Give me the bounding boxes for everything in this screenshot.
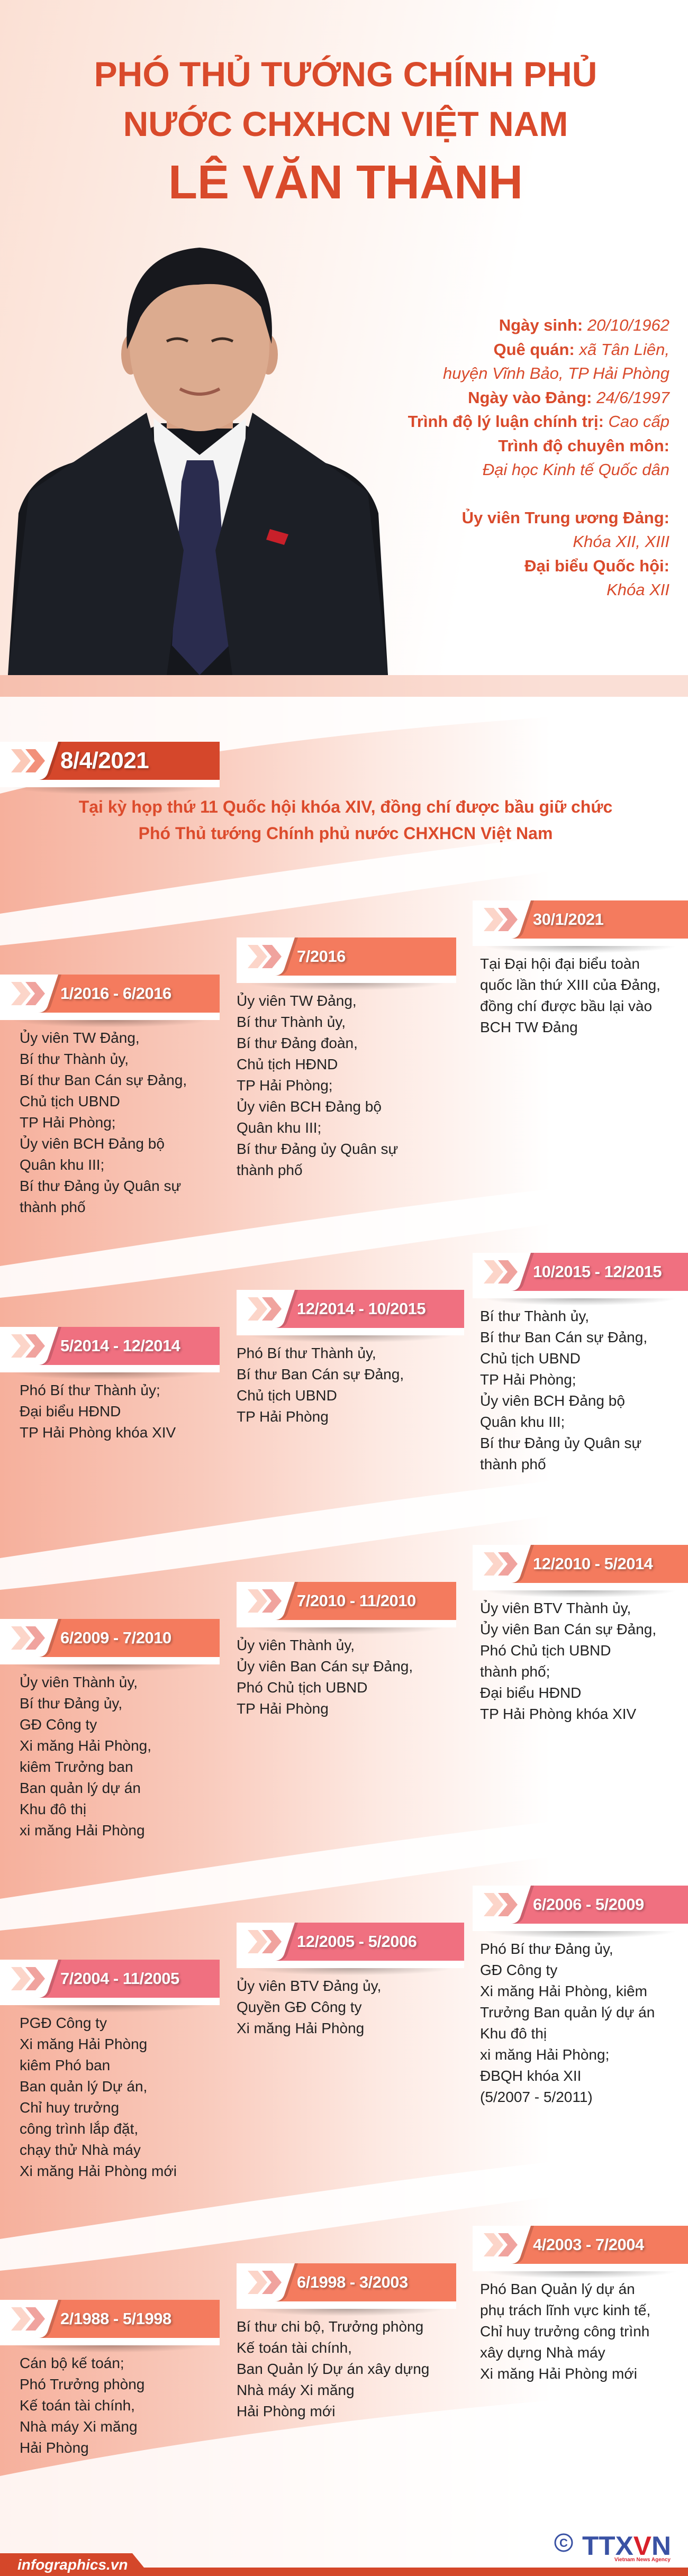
banner: 7/2016 bbox=[237, 937, 456, 989]
portrait illustration bbox=[8, 248, 388, 675]
text: 30/1/2021: Tại Đại hội đại biểu toàn bbox=[480, 955, 640, 972]
banner: 8/4/2021: 8/4/2021 bbox=[60, 748, 149, 773]
banner: 12/2010 - 5/2014: 12/2010 - 5/2014 bbox=[533, 1554, 653, 1573]
text: 6/2009 - 7/2010: GĐ Công ty bbox=[20, 1716, 97, 1733]
banner: 7/2004 - 11/2005: 7/2004 - 11/2005 bbox=[60, 1969, 179, 1988]
text: 10/2015 - 12/2015: Ủy viên BCH Đảng bộ bbox=[480, 1392, 625, 1409]
info block: Trình độ lý luận chính trị: Cao cấp bbox=[408, 412, 669, 431]
banner: 5/2014 - 12/2014 bbox=[0, 1327, 220, 1379]
banner: 2/1988 - 5/1998 bbox=[0, 2300, 220, 2353]
text: 12/2010 - 5/2014 bbox=[480, 1600, 656, 1722]
text: 1/2016 - 6/2016: Ủy viên BCH Đảng bộ bbox=[20, 1135, 165, 1152]
banner: 6/2006 - 5/2009: 6/2006 - 5/2009 bbox=[533, 1895, 644, 1914]
text: 7/2004 - 11/2005: kiêm Phó ban bbox=[20, 2057, 110, 2073]
text: 10/2015 - 12/2015: Quân khu III; bbox=[480, 1414, 565, 1430]
headline text: Tại kỳ họp thứ 11 Quốc hội khóa XIV, đồng chí được bầu giữ chức bbox=[79, 797, 612, 816]
info block: Khóa XII, XIII bbox=[573, 532, 669, 551]
text: 5/2014 - 12/2014: TP Hải Phòng khóa XIV bbox=[20, 1424, 176, 1441]
text: 10/2015 - 12/2015: TP Hải Phòng; bbox=[480, 1371, 576, 1388]
text: 1/2016 - 6/2016: TP Hải Phòng; bbox=[20, 1114, 116, 1131]
text: 12/2005 - 5/2006 bbox=[237, 1978, 381, 2036]
info block: Đại biểu Quốc hội: bbox=[524, 557, 669, 575]
text: 12/2010 - 5/2014: Ủy viên BTV Thành ủy, bbox=[480, 1600, 631, 1616]
text: 4/2003 - 7/2004: phụ trách lĩnh vực kinh tế, bbox=[480, 2302, 650, 2318]
text: 12/2010 - 5/2014: Đại biểu HĐND bbox=[480, 1685, 581, 1701]
banner: 2/1988 - 5/1998: 2/1988 - 5/1998 bbox=[60, 2309, 171, 2328]
text: 6/2009 - 7/2010: xi măng Hải Phòng bbox=[20, 1822, 145, 1838]
text: 10/2015 - 12/2015: Chủ tịch UBND bbox=[480, 1350, 581, 1367]
text: 1/2016 - 6/2016: Bí thư Thành ủy, bbox=[20, 1051, 129, 1067]
logo: TTXVN: TTXVN bbox=[582, 2532, 671, 2561]
info block: Quê quán: xã Tân Liên, bbox=[493, 340, 669, 359]
text: 2/1988 - 5/1998: Cán bộ kế toán; bbox=[20, 2355, 124, 2371]
banner: 7/2004 - 11/2005 bbox=[0, 1960, 220, 2011]
text: 7/2004 - 11/2005: PGĐ Công ty bbox=[20, 2015, 107, 2031]
banner: 8/4/2021 bbox=[0, 742, 220, 794]
headline text bbox=[79, 797, 612, 843]
info block: Khóa XII bbox=[606, 580, 669, 599]
text: 6/2006 - 5/2009: xi măng Hải Phòng; bbox=[480, 2046, 609, 2063]
timeline background bbox=[0, 675, 688, 2576]
banner: 30/1/2021 bbox=[473, 900, 688, 952]
text: 1/2016 - 6/2016: Ủy viên TW Đảng, bbox=[20, 1030, 140, 1046]
text: 7/2004 - 11/2005: công trình lắp đặt, bbox=[20, 2120, 138, 2137]
text: 12/2014 - 10/2015: Chủ tịch UBND bbox=[237, 1387, 337, 1404]
text: 12/2010 - 5/2014: Ủy viên Ban Cán sự Đảng, bbox=[480, 1621, 656, 1637]
banner: 6/1998 - 3/2003 bbox=[237, 2263, 456, 2315]
banner: 1/2016 - 6/2016: 1/2016 - 6/2016 bbox=[60, 984, 171, 1003]
text: 7/2004 - 11/2005: Xi măng Hải Phòng bbox=[20, 2036, 147, 2052]
banner: 12/2005 - 5/2006 bbox=[237, 1923, 464, 1974]
text: 2/1988 - 5/1998: Kế toán tài chính, bbox=[20, 2397, 135, 2414]
logo: TTXVN: C bbox=[559, 2536, 568, 2550]
text: 5/2014 - 12/2014: Phó Bí thư Thành ủy; bbox=[20, 1382, 160, 1398]
text: 1/2016 - 6/2016: Chủ tịch UBND bbox=[20, 1093, 120, 1109]
title: LÊ VĂN THÀNH bbox=[168, 156, 523, 209]
text: 7/2016: thành phố bbox=[237, 1162, 303, 1178]
text: 6/2009 - 7/2010: kiêm Trưởng ban bbox=[20, 1759, 133, 1775]
info block: Ngày sinh: 20/10/1962 bbox=[499, 316, 669, 334]
text: 6/2006 - 5/2009: Phó Bí thư Đảng ủy, bbox=[480, 1941, 613, 1957]
text: 6/2006 - 5/2009: ĐBQH khóa XII bbox=[480, 2068, 581, 2084]
text: 7/2016: Bí thư Đảng đoàn, bbox=[237, 1035, 358, 1051]
text: 30/1/2021 bbox=[480, 955, 660, 1035]
text: 7/2010 - 11/2010 bbox=[237, 1637, 413, 1717]
text: 6/1998 - 3/2003 bbox=[237, 2316, 429, 2422]
banner: 4/2003 - 7/2004 bbox=[473, 2226, 688, 2278]
text: 1/2016 - 6/2016: Bí thư Ban Cán sự Đảng, bbox=[20, 1072, 187, 1088]
text: 7/2010 - 11/2010: TP Hải Phòng bbox=[237, 1700, 329, 1717]
text: 10/2015 - 12/2015 bbox=[480, 1308, 647, 1472]
text: 10/2015 - 12/2015: Bí thư Đảng ủy Quân sự bbox=[480, 1435, 641, 1451]
text: 12/2010 - 5/2014: thành phố; bbox=[480, 1663, 550, 1680]
logo: TTXVN bbox=[553, 2532, 675, 2563]
header background bbox=[0, 0, 688, 675]
text: 2/1988 - 5/1998 bbox=[20, 2353, 144, 2459]
banner: 6/2006 - 5/2009 bbox=[473, 1886, 688, 1937]
text: 7/2016: Ủy viên TW Đảng, bbox=[237, 993, 357, 1009]
title: NƯỚC CHXHCN VIỆT NAM bbox=[123, 104, 568, 143]
text: 1/2016 - 6/2016: Bí thư Đảng ủy Quân sự bbox=[20, 1178, 181, 1194]
text: 7/2016: Ủy viên BCH Đảng bộ bbox=[237, 1098, 382, 1115]
text: 6/2006 - 5/2009: Xi măng Hải Phòng, kiêm bbox=[480, 1983, 647, 1999]
banner: 12/2014 - 10/2015: 12/2014 - 10/2015 bbox=[297, 1299, 426, 1318]
banner: 6/1998 - 3/2003: 6/1998 - 3/2003 bbox=[297, 2273, 408, 2291]
text: 12/2010 - 5/2014: Phó Chủ tịch UBND bbox=[480, 1642, 611, 1659]
banner: 7/2016: 7/2016 bbox=[297, 947, 346, 966]
banner: 10/2015 - 12/2015 bbox=[473, 1253, 688, 1305]
banner: 12/2005 - 5/2006: 12/2005 - 5/2006 bbox=[297, 1932, 417, 1951]
text: 6/2006 - 5/2009: Khu đô thị bbox=[480, 2025, 547, 2042]
footer text: infographics.vn bbox=[17, 2556, 128, 2573]
text: 6/2009 - 7/2010: Ban quản lý dự án bbox=[20, 1780, 141, 1796]
text: 4/2003 - 7/2004: Chỉ huy trưởng công trình bbox=[480, 2323, 649, 2340]
text: 2/1988 - 5/1998: Phó Trưởng phòng bbox=[20, 2376, 144, 2392]
banner: 30/1/2021: 30/1/2021 bbox=[533, 910, 603, 929]
text: 6/2009 - 7/2010: Bí thư Đảng ủy, bbox=[20, 1695, 122, 1712]
info block: huyện Vĩnh Bảo, TP Hải Phòng bbox=[443, 364, 669, 383]
text: 6/2006 - 5/2009: (5/2007 - 5/2011) bbox=[480, 2089, 593, 2105]
text: 2/1988 - 5/1998: Hải Phòng bbox=[20, 2440, 89, 2456]
text: 7/2004 - 11/2005 bbox=[20, 2015, 177, 2179]
text: 4/2003 - 7/2004: xây dựng Nhà máy bbox=[480, 2344, 605, 2361]
info block: Ủy viên Trung ương Đảng: bbox=[462, 508, 669, 527]
text: 30/1/2021: BCH TW Đảng bbox=[480, 1019, 578, 1035]
text: 7/2016: Quân khu III; bbox=[237, 1119, 321, 1136]
title bbox=[94, 54, 597, 209]
text: 12/2014 - 10/2015 bbox=[237, 1345, 404, 1425]
text: 7/2010 - 11/2010: Ủy viên Thành ủy, bbox=[237, 1637, 355, 1653]
text: 7/2016: Bí thư Thành ủy, bbox=[237, 1014, 346, 1030]
logo: TTXVN: Vietnam News Agency bbox=[614, 2557, 671, 2563]
info block: Ngày vào Đảng: 24/6/1997 bbox=[468, 388, 669, 406]
text: 5/2014 - 12/2014 bbox=[20, 1382, 176, 1441]
text: 2/1988 - 5/1998: Nhà máy Xi măng bbox=[20, 2418, 138, 2435]
text: 6/2009 - 7/2010: Khu đô thị bbox=[20, 1801, 86, 1817]
text: 4/2003 - 7/2004 bbox=[480, 2281, 650, 2382]
text: 7/2016 bbox=[237, 993, 398, 1178]
banner: 4/2003 - 7/2004: 4/2003 - 7/2004 bbox=[533, 2235, 644, 2254]
text: 7/2016: TP Hải Phòng; bbox=[237, 1077, 333, 1094]
text: 10/2015 - 12/2015: Bí thư Thành ủy, bbox=[480, 1308, 589, 1324]
banner: 7/2010 - 11/2010: 7/2010 - 11/2010 bbox=[297, 1591, 416, 1610]
text: 7/2004 - 11/2005: Chỉ huy trưởng bbox=[20, 2099, 119, 2116]
text: 12/2005 - 5/2006: Xi măng Hải Phòng bbox=[237, 2020, 364, 2036]
text: 6/2009 - 7/2010: Xi măng Hải Phòng, bbox=[20, 1737, 151, 1754]
text: 6/1998 - 3/2003: Ban Quản lý Dự án xây dựng bbox=[237, 2361, 429, 2377]
headline text: Phó Thủ tướng Chính phủ nước CHXHCN Việt Nam bbox=[139, 824, 553, 843]
banner: 12/2014 - 10/2015 bbox=[237, 1290, 464, 1342]
banner: 7/2010 - 11/2010 bbox=[237, 1582, 456, 1634]
text: 6/1998 - 3/2003: Hải Phòng mới bbox=[237, 2403, 335, 2419]
text: 4/2003 - 7/2004: Xi măng Hải Phòng mới bbox=[480, 2365, 637, 2382]
title: PHÓ THỦ TƯỚNG CHÍNH PHỦ bbox=[94, 54, 597, 94]
text: 6/1998 - 3/2003: Kế toán tài chính, bbox=[237, 2340, 352, 2356]
text: 6/2006 - 5/2009 bbox=[480, 1941, 655, 2105]
info block bbox=[408, 316, 670, 599]
text: 12/2014 - 10/2015: TP Hải Phòng bbox=[237, 1408, 329, 1425]
text: 7/2010 - 11/2010: Phó Chủ tịch UBND bbox=[237, 1679, 367, 1696]
text: 12/2014 - 10/2015: Bí thư Ban Cán sự Đảng, bbox=[237, 1366, 404, 1382]
banner: 12/2010 - 5/2014 bbox=[473, 1545, 688, 1597]
text: 6/2009 - 7/2010 bbox=[20, 1674, 151, 1838]
text: 7/2010 - 11/2010: Ủy viên Ban Cán sự Đảng, bbox=[237, 1658, 413, 1674]
text: 6/2009 - 7/2010: Ủy viên Thành ủy, bbox=[20, 1674, 138, 1690]
banner: 6/2009 - 7/2010: 6/2009 - 7/2010 bbox=[60, 1628, 171, 1647]
banner: 5/2014 - 12/2014: 5/2014 - 12/2014 bbox=[60, 1336, 180, 1355]
text: 7/2004 - 11/2005: chạy thử Nhà máy bbox=[20, 2142, 141, 2158]
text: 7/2016: Bí thư Đảng ủy Quân sự bbox=[237, 1141, 398, 1157]
text: 30/1/2021: đồng chí được bầu lại vào bbox=[480, 998, 652, 1014]
text: 1/2016 - 6/2016 bbox=[20, 1030, 187, 1215]
text: 30/1/2021: quốc lần thứ XIII của Đảng, bbox=[480, 977, 660, 993]
banner: 6/2009 - 7/2010 bbox=[0, 1619, 220, 1671]
text: 12/2010 - 5/2014: TP Hải Phòng khóa XIV bbox=[480, 1706, 636, 1722]
banner: 10/2015 - 12/2015: 10/2015 - 12/2015 bbox=[533, 1262, 662, 1281]
text: 4/2003 - 7/2004: Phó Ban Quản lý dự án bbox=[480, 2281, 635, 2297]
text: 12/2014 - 10/2015: Phó Bí thư Thành ủy, bbox=[237, 1345, 376, 1361]
text: 10/2015 - 12/2015: Bí thư Ban Cán sự Đảng, bbox=[480, 1329, 647, 1345]
text: 1/2016 - 6/2016: Quân khu III; bbox=[20, 1157, 104, 1173]
info block: Trình độ chuyên môn: bbox=[498, 436, 669, 455]
text: 7/2004 - 11/2005: Ban quản lý Dự án, bbox=[20, 2078, 147, 2095]
text: 10/2015 - 12/2015: thành phố bbox=[480, 1456, 546, 1472]
text: 7/2016: Chủ tịch HĐND bbox=[237, 1056, 338, 1072]
text: 5/2014 - 12/2014: Đại biểu HĐND bbox=[20, 1403, 121, 1419]
text: 12/2005 - 5/2006: Quyền GĐ Công ty bbox=[237, 1999, 362, 2015]
text: 12/2005 - 5/2006: Ủy viên BTV Đảng ủy, bbox=[237, 1978, 381, 1994]
footer bar bbox=[0, 2553, 688, 2576]
text: 6/2006 - 5/2009: GĐ Công ty bbox=[480, 1962, 557, 1978]
text: 6/1998 - 3/2003: Bí thư chi bộ, Trưởng phòng bbox=[237, 2318, 423, 2335]
text: 6/2006 - 5/2009: Trưởng Ban quản lý dự án bbox=[480, 2004, 655, 2020]
text: 1/2016 - 6/2016: thành phố bbox=[20, 1199, 86, 1215]
info block: Đại học Kinh tế Quốc dân bbox=[483, 460, 669, 479]
text: 7/2004 - 11/2005: Xi măng Hải Phòng mới bbox=[20, 2163, 177, 2179]
text: 6/1998 - 3/2003: Nhà máy Xi măng bbox=[237, 2382, 355, 2398]
banner: 1/2016 - 6/2016 bbox=[0, 975, 220, 1026]
